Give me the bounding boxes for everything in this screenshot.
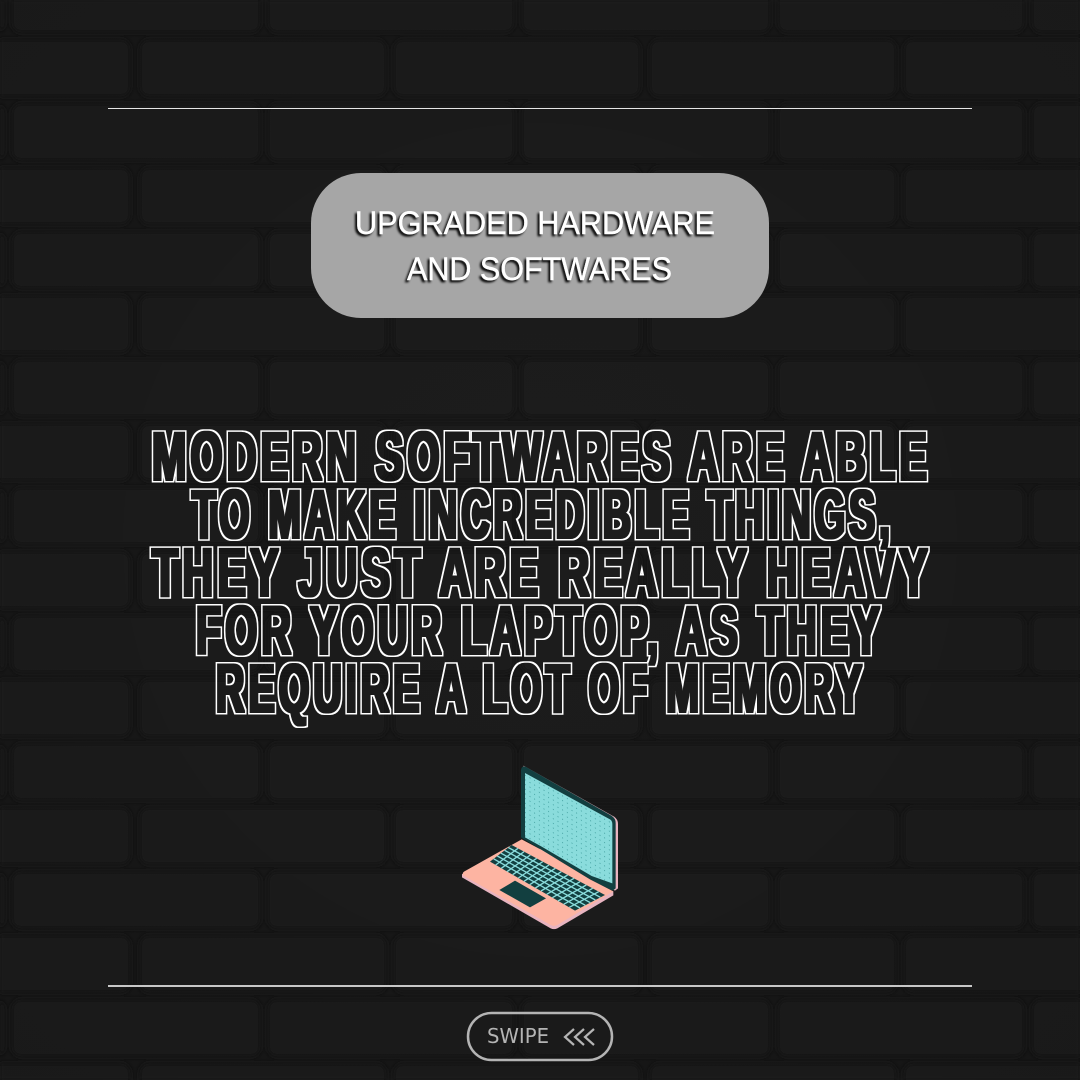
top divider line <box>108 108 972 109</box>
laptop screen <box>521 766 618 891</box>
heading text: UPGRADED HARDWARE <box>355 205 715 241</box>
icon: triple chevron arrow <box>565 1029 594 1045</box>
pill background <box>311 173 769 318</box>
heading pill <box>311 173 769 318</box>
laptop keyboard <box>490 845 605 911</box>
heading text <box>355 205 715 287</box>
swipe button <box>468 1013 612 1060</box>
body text: outlined statement <box>152 418 932 727</box>
button outline <box>468 1013 612 1060</box>
heading text: AND SOFTWARES <box>407 251 672 287</box>
icon: laptop <box>462 766 618 929</box>
swipe label: SWIPE <box>487 1024 549 1048</box>
bottom divider line <box>108 985 972 987</box>
laptop trackpad <box>499 881 546 907</box>
laptop base <box>462 839 613 929</box>
